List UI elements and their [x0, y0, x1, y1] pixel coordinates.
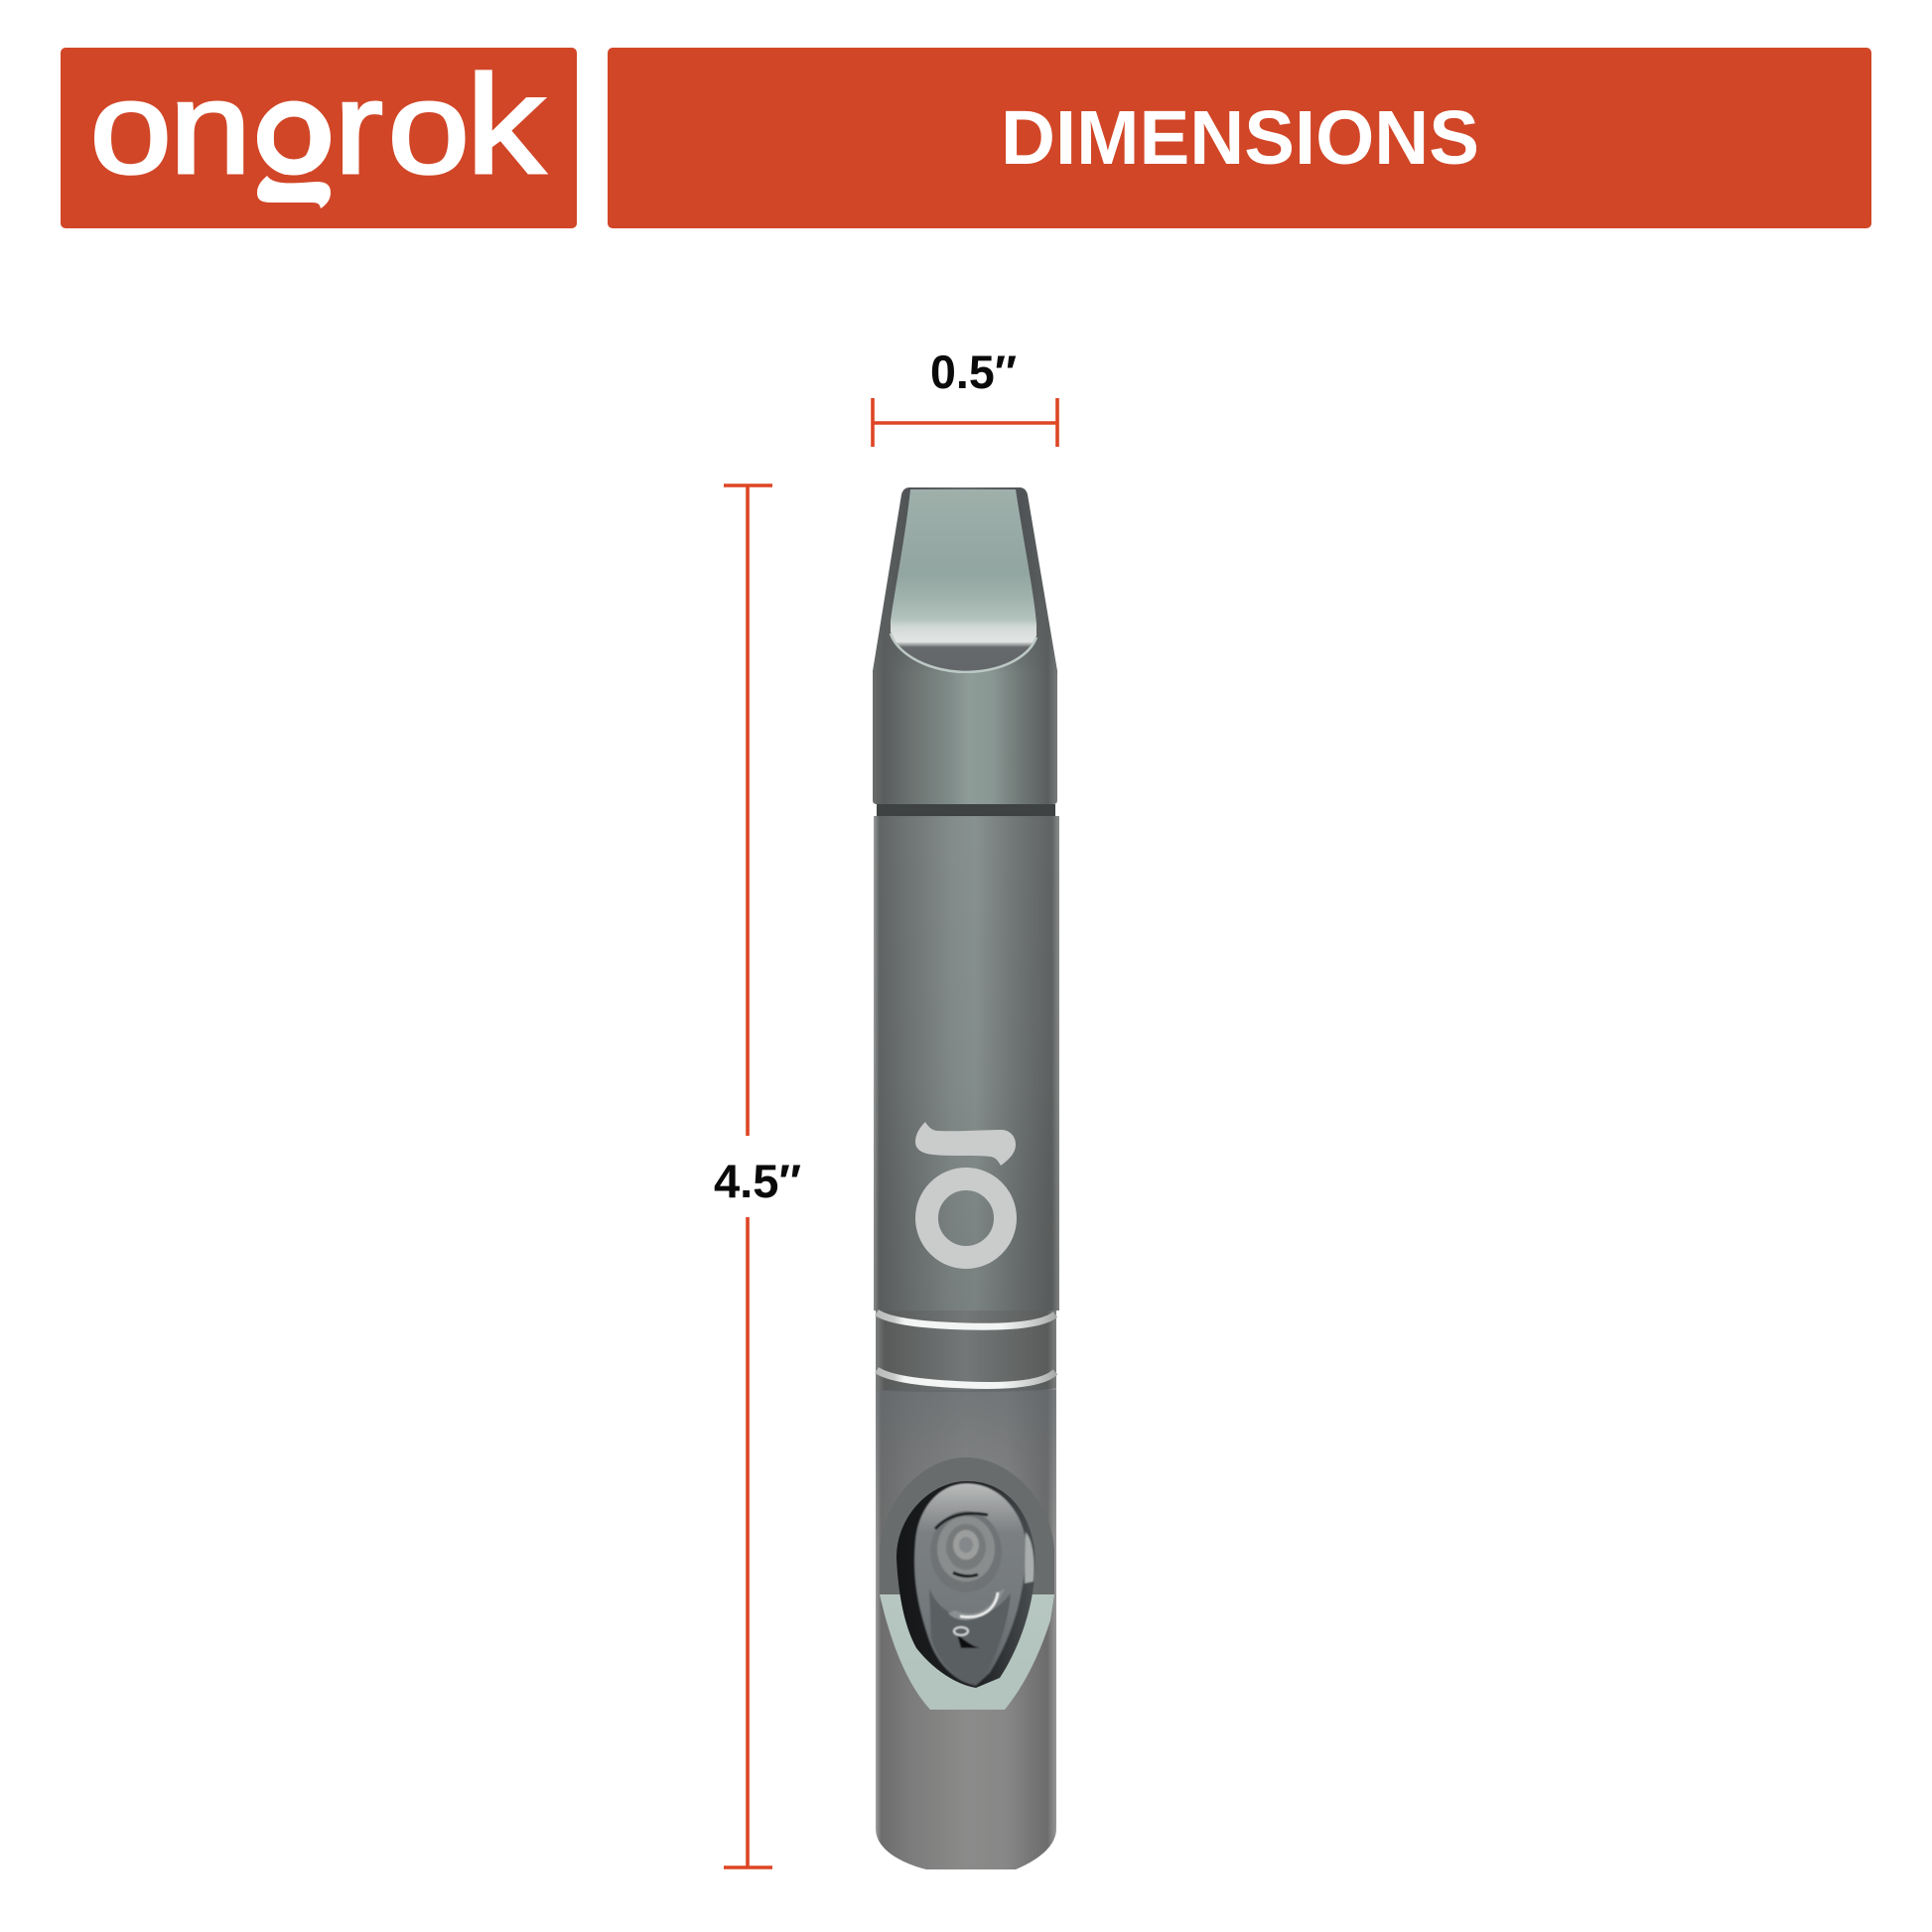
flat scoop face — [891, 489, 1036, 672]
o-ring — [877, 804, 1055, 816]
cap section — [873, 673, 1057, 804]
glass body — [897, 1481, 1035, 1688]
glass window — [880, 1457, 1054, 1710]
lower body — [876, 1388, 1056, 1869]
header — [61, 46, 1871, 228]
engraved logo mark — [915, 1122, 1016, 1257]
width dimension — [873, 345, 1057, 447]
width label: 0.5″ — [930, 345, 1017, 398]
scoop rim highlight — [891, 633, 1036, 672]
tip — [873, 487, 1057, 675]
title: DIMENSIONS — [1001, 95, 1479, 181]
grooved band — [876, 1311, 1056, 1395]
logo wordmark: ongrok: ongro — [89, 55, 470, 201]
logo hook — [257, 176, 331, 208]
glass swirl — [914, 1483, 1035, 1686]
upper body — [874, 816, 1059, 1311]
product: grey dab tool — [873, 487, 1059, 1869]
height dimension — [714, 485, 801, 1867]
logo wordmark: ongrok: k — [466, 46, 546, 203]
logo panel — [61, 46, 577, 228]
height label: 4.5″ — [714, 1155, 801, 1207]
width arrow — [873, 398, 1057, 447]
height arrow — [724, 485, 772, 1867]
title panel — [608, 48, 1871, 228]
